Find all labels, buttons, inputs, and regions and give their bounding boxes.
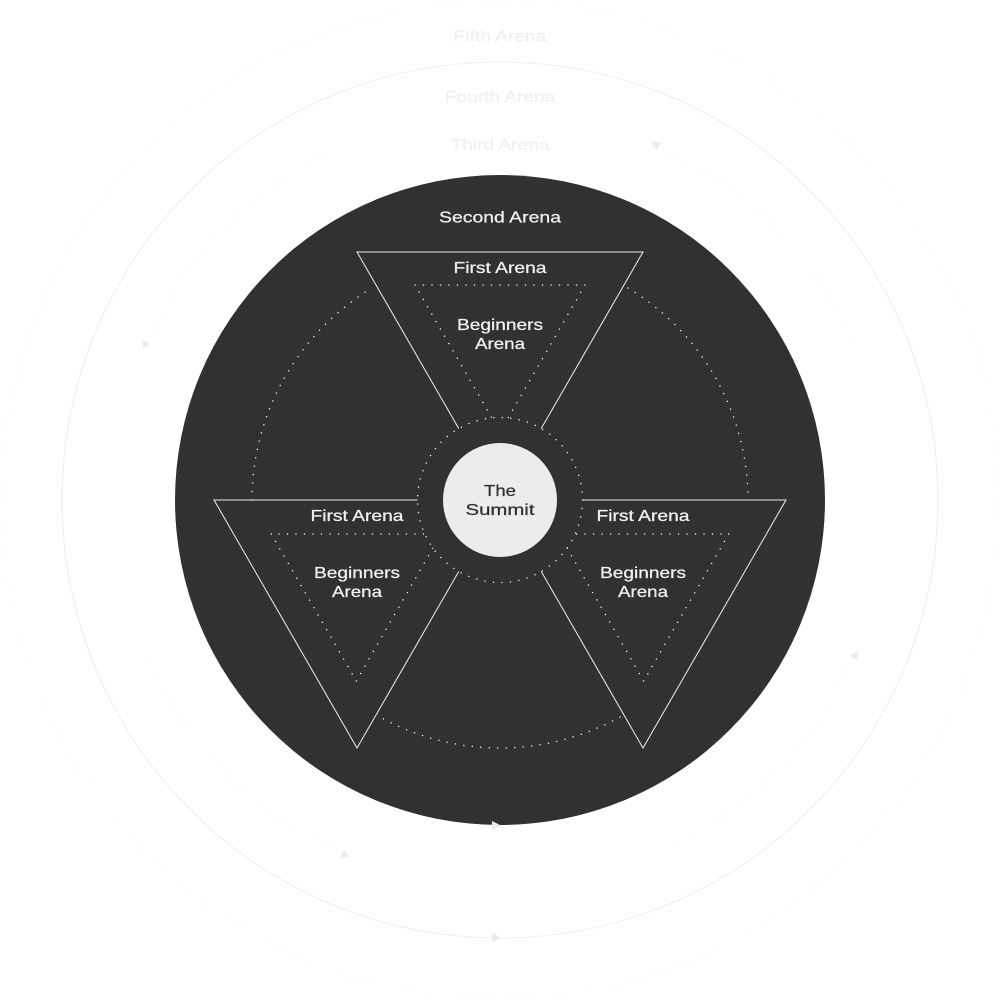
panel: right triangle [540, 500, 787, 749]
summit circle [443, 443, 557, 557]
label: the summit: Summit [466, 502, 535, 519]
label: right beginners arena: Beginners [600, 565, 686, 582]
label: right beginners arena: Arena [618, 584, 668, 601]
icon: arrow left [142, 340, 150, 348]
heading: fifth arena: Fifth Arena [454, 28, 547, 46]
label: top first arena: First Arena [454, 260, 547, 277]
label: top beginners arena [457, 317, 543, 353]
heading: second arena: Second Arena [439, 210, 561, 226]
label: left beginners arena: Arena [332, 584, 382, 601]
icon: arrow bottom left [340, 850, 349, 858]
icon: arrow top right [651, 142, 660, 151]
second arena inner dotted arcs [252, 288, 748, 748]
icon: arrow on second arena edge [492, 821, 501, 830]
label: top beginners arena: Beginners [457, 317, 543, 334]
panel: top triangle [356, 252, 644, 429]
label: right beginners arena [600, 565, 686, 601]
icon: arrow right [850, 651, 858, 660]
icon: arrow on fourth ring [492, 933, 501, 942]
label: left first arena: First Arena [310, 508, 404, 525]
third arena dotted arcs [146, 146, 854, 854]
second arena disc [175, 175, 825, 825]
heading: fourth arena: Fourth Arena [445, 89, 555, 106]
label: left beginners arena [314, 565, 400, 601]
fourth arena ring [62, 62, 938, 938]
heading: third arena: Third Arena [450, 137, 550, 154]
label: left beginners arena: Beginners [314, 565, 400, 582]
label: right first arena: First Arena [596, 508, 690, 525]
label: the summit [466, 483, 535, 519]
panel: left triangle [213, 500, 460, 749]
label: top beginners arena: Arena [475, 336, 525, 353]
summit dotted ring [418, 418, 582, 582]
label: the summit: The [484, 483, 516, 500]
